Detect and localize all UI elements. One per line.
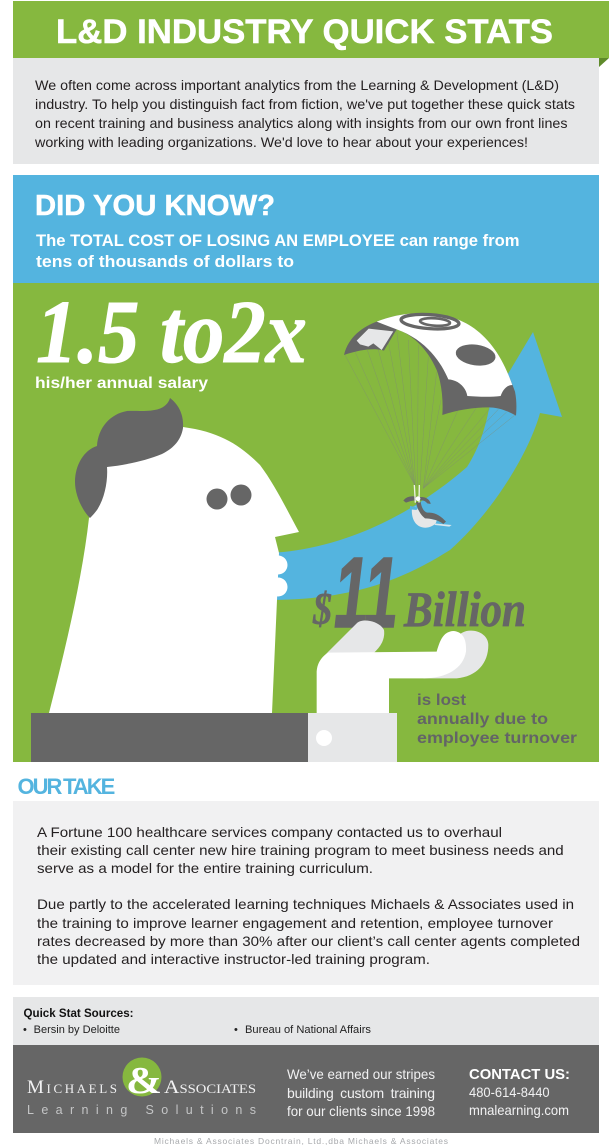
tagline: We’ve earned our stripes <box>287 1066 435 1082</box>
panel: our take: Due partly to the accelerated learning techniques Michaels & Associates used in <box>37 896 574 912</box>
intro panel: working with leading organizations. We'd love to hear about your experiences! <box>34 134 528 150</box>
panel: quick stat sources: Bureau of National Affairs <box>245 1024 371 1036</box>
hand holding the money <box>317 621 488 713</box>
pilot <box>412 507 437 528</box>
suit sleeve <box>31 713 308 762</box>
turnover caption: employee turnover <box>417 730 577 747</box>
intro panel: on recent training and business analytics along with insights from our own front lines <box>35 115 568 131</box>
stat: 11 billion: Billion <box>403 581 526 637</box>
panel: green illustration background <box>13 283 599 762</box>
panel: our take: the training to improve learner engagement and retention, employee turnover <box>37 915 553 931</box>
panel: quick stat sources: Quick Stat Sources: <box>24 1008 134 1020</box>
logo: & <box>126 1060 162 1102</box>
legal line: Michaels & Associates Docntrain, Ltd.,dba Michaels & Associates <box>154 1136 448 1146</box>
salary caption: his/her annual salary <box>35 375 208 392</box>
logo: Learning Solutions <box>27 1103 256 1117</box>
parachute with falling employee <box>344 313 516 528</box>
panel: our take: the updated and interactive instructor-led training program. <box>37 951 430 967</box>
panel: footer <box>13 1045 599 1133</box>
contact: CONTACT US: <box>469 1066 570 1083</box>
panel: did you know: tens of thousands of dollars to <box>36 252 294 271</box>
canopy <box>344 313 516 416</box>
panel: quick stat sources: • <box>23 1024 27 1036</box>
big stat: 1.5 to 2x: 1.5 to2x <box>36 283 307 382</box>
panel: did you know <box>13 175 599 283</box>
turnover caption: annually due to <box>417 711 548 728</box>
turnover caption <box>417 692 577 747</box>
logo: Michaels <box>27 1077 117 1098</box>
contact <box>469 1066 570 1118</box>
logo <box>27 1058 256 1117</box>
title banner: L&D INDUSTRY QUICK STATS <box>56 13 553 51</box>
panel: did you know: The TOTAL COST OF LOSING AN EMPLOYEE can range from <box>36 231 520 250</box>
stat: 11 billion: $ <box>312 583 332 634</box>
intro panel: We often come across important analytics from the Learning & Development (L&D) <box>35 77 559 93</box>
panel: did you know: DID YOU KNOW? <box>35 190 275 222</box>
parachute lines <box>345 330 515 488</box>
eyes <box>206 488 228 510</box>
tagline: building custom training <box>287 1085 435 1101</box>
heading: our take: OUR TAKE <box>18 774 115 799</box>
contact: mnalearning.com <box>469 1102 569 1118</box>
panel: quick stat sources <box>13 997 599 1045</box>
tagline: for our clients since 1998 <box>287 1103 435 1119</box>
arrow: rising blue arrow <box>270 332 562 600</box>
turnover caption: is lost <box>417 692 467 709</box>
intro panel <box>13 58 599 164</box>
panel: our take: their existing call center new hire training program to meet business needs and <box>37 842 564 858</box>
person: white figure <box>31 398 308 762</box>
tagline <box>287 1066 435 1119</box>
panel: our take: A Fortune 100 healthcare services company contacted us to overhaul <box>37 824 502 840</box>
panel: quick stat sources: Bersin by Deloitte <box>34 1024 120 1036</box>
stat: 11 billion: 11 <box>334 537 398 649</box>
stat: 11 billion <box>312 537 526 649</box>
shirt cuff with button <box>308 713 397 762</box>
panel: our take: rates decreased by more than 30% after our client’s call center agents completed <box>37 933 580 949</box>
panel: our take: serve as a model for the entire training curriculum. <box>37 860 373 876</box>
hair <box>75 398 183 518</box>
logo: Associates <box>164 1077 256 1098</box>
intro panel: industry. To help you distinguish fact from fiction, we've put together these quick stats <box>35 96 575 112</box>
panel: quick stat sources: • <box>234 1024 238 1036</box>
contact: 480-614-8440 <box>469 1084 550 1100</box>
panel: our take <box>13 801 599 985</box>
title banner <box>13 1 609 67</box>
